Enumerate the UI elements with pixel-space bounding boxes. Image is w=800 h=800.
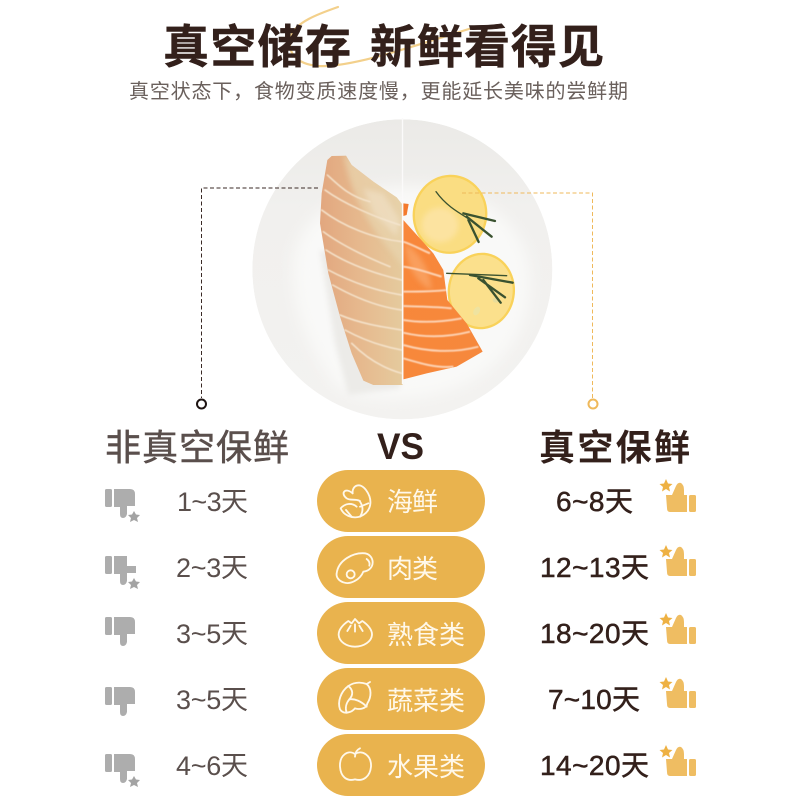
- title: [163, 21, 604, 73]
- category pill: [317, 470, 485, 532]
- icon: meat: [337, 553, 373, 583]
- thumbs down: [105, 489, 140, 522]
- category label: 水果类: [387, 752, 465, 782]
- row 4: vegetables: [105, 668, 696, 730]
- category label: 熟食类: [387, 620, 465, 650]
- plate comparison photo: [252, 118, 552, 419]
- thumbs up: [660, 677, 696, 708]
- category label: 海鲜: [387, 487, 438, 517]
- thumbs up: [660, 745, 696, 776]
- vacuum days: 12~13天: [540, 552, 649, 583]
- thumbs down: [105, 617, 135, 646]
- category label: 肉类: [387, 554, 438, 584]
- row 3: cooked food: [105, 602, 696, 664]
- vacuum days: 6~8天: [556, 486, 633, 517]
- row 1: seafood: [105, 470, 696, 532]
- non-vacuum days: 3~5天: [176, 619, 248, 649]
- icon: shrimp: [341, 485, 370, 517]
- thumbs down: [105, 687, 135, 716]
- vacuum days: 14~20天: [540, 750, 649, 781]
- category pill: [317, 734, 485, 796]
- plate: [252, 119, 552, 419]
- thumbs up: [660, 613, 696, 644]
- stale fish half: [318, 153, 407, 387]
- subtitle: 真空状态下，食物变质速度慢，更能延长美味的尝鲜期: [129, 80, 628, 103]
- thumbs up: [660, 479, 696, 512]
- title: 真空储存: [163, 21, 351, 73]
- thumbs down: [105, 754, 140, 787]
- rosemary sprigs: [436, 192, 513, 303]
- title: 新鲜看得见: [370, 21, 604, 73]
- non-vacuum days: 1~3天: [177, 487, 248, 517]
- fresh salmon half: [402, 203, 485, 383]
- category pill: [317, 602, 485, 664]
- left callout leader line: [197, 188, 318, 408]
- lemon slice top: [406, 169, 494, 260]
- row 2: meat: [105, 536, 696, 598]
- heading: vacuum: 真空保鲜: [539, 427, 690, 468]
- divider line: [400, 118, 404, 384]
- right callout leader line: [462, 193, 598, 408]
- thumbs down: [105, 556, 140, 589]
- category label: 蔬菜类: [387, 686, 465, 716]
- non-vacuum days: 2~3天: [176, 553, 248, 583]
- row 5: fruit: [105, 734, 696, 796]
- non-vacuum days: 4~6天: [176, 751, 248, 781]
- vacuum days: 18~20天: [540, 618, 649, 649]
- icon: vegetables: [339, 682, 371, 713]
- icon: apple: [340, 748, 371, 780]
- fish shadow: [320, 250, 403, 395]
- lemon slice bottom: [444, 250, 518, 332]
- category pill: [317, 536, 485, 598]
- non-vacuum days: 3~5天: [176, 685, 248, 715]
- heading: non-vacuum: 非真空保鲜: [105, 427, 289, 468]
- thumbs up: [660, 545, 696, 576]
- heading: VS: VS: [377, 426, 424, 467]
- decorative swoosh behind title: [290, 7, 472, 66]
- icon: steamed bun: [339, 619, 372, 647]
- vacuum days: 7~10天: [548, 684, 640, 715]
- category pill: [317, 668, 485, 730]
